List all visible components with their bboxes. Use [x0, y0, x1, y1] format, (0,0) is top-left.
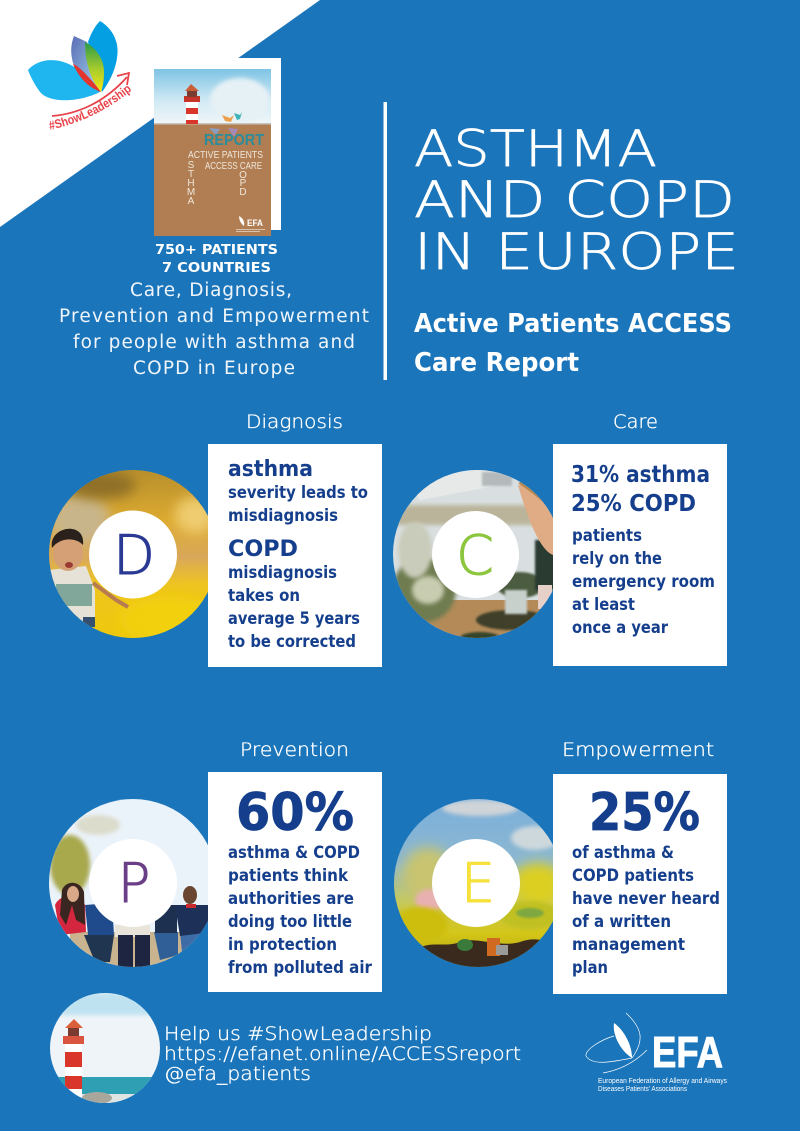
report description: COPD in Europe [133, 358, 295, 379]
title: IN EUROPE [414, 223, 739, 281]
panel: Diagnosis: misdiagnosis [228, 506, 338, 525]
title: ASTHMA [414, 120, 657, 178]
report cover: M [187, 187, 195, 198]
photo circle: Prevention: P [118, 852, 150, 915]
report stats: 750+ PATIENTS [155, 243, 278, 258]
panel: Diagnosis: severity leads to [228, 483, 368, 502]
photo circle: Empowerment: E [461, 852, 495, 915]
photo circle: lighthouse [50, 993, 160, 1104]
label: Care: Care [613, 411, 658, 433]
panel: Care [553, 444, 727, 666]
panel: Diagnosis [208, 444, 382, 667]
panel: Care: 31% asthma [571, 462, 710, 488]
report cover: H [187, 178, 195, 189]
label: Empowerment: Empowerment [562, 739, 714, 761]
title [414, 120, 739, 281]
report stats: 7 COUNTRIES [162, 261, 271, 276]
panel: Empowerment: COPD patients [572, 866, 694, 885]
panel: Diagnosis: asthma [228, 457, 313, 482]
panel: Care: emergency room [572, 572, 715, 591]
report description: Prevention and Empowerment [59, 306, 369, 327]
people [55, 896, 86, 935]
panel: Prevention: 60% [236, 783, 354, 843]
panel: Diagnosis: average 5 years [228, 609, 360, 628]
report description [59, 280, 369, 379]
photo circle: Prevention [49, 799, 217, 968]
logo: EFA [586, 1013, 727, 1093]
report cover: ACCESS CARE [205, 161, 262, 172]
report cover: O [239, 170, 247, 181]
photo circle: Empowerment [392, 799, 564, 970]
label: Diagnosis: Diagnosis [246, 411, 343, 433]
panel: Prevention: asthma & COPD [228, 843, 360, 862]
logo: EFA: Diseases Patients' Associations [598, 1086, 687, 1093]
report cover: ACTIVE PATIENTS [188, 150, 263, 161]
call to action text: https://efanet.online/ACCESSreport [164, 1043, 521, 1065]
subtitle [414, 309, 732, 378]
panel: Diagnosis: COPD [228, 537, 298, 562]
call to action text: @efa_patients [164, 1063, 311, 1085]
birds [209, 112, 242, 137]
logo: #ShowLeadership butterfly: #ShowLeadership [49, 86, 131, 130]
report cover: D [239, 187, 247, 198]
logo: EFA: EFA [652, 1028, 723, 1077]
call to action text: Help us #ShowLeadership [164, 1023, 432, 1045]
panel: Prevention [208, 772, 382, 992]
report description: Care, Diagnosis, [130, 280, 292, 301]
panel: Care: at least [572, 595, 635, 614]
panel: Empowerment: plan [572, 958, 608, 977]
report cover: P [240, 178, 247, 189]
report cover: S [188, 160, 195, 171]
panel: Diagnosis: misdiagnosis [228, 563, 337, 582]
logo: EFA: European Federation of Allergy and Airways [598, 1078, 727, 1085]
panel: Empowerment: management [572, 935, 685, 954]
panel: Prevention: authorities are [228, 889, 354, 908]
photo circle: Diagnosis [49, 470, 208, 638]
child [48, 566, 95, 625]
label: Prevention: Prevention [240, 739, 349, 761]
logo: #ShowLeadership butterfly [28, 21, 131, 130]
panel: Empowerment [553, 774, 727, 994]
report cover [154, 69, 271, 236]
title: AND COPD [414, 171, 735, 229]
photo circle: Care: C [456, 524, 494, 587]
panel: Empowerment: of a written [572, 912, 671, 931]
panel: Diagnosis: to be corrected [228, 632, 356, 651]
white corner triangle [0, 0, 320, 227]
panel: Empowerment: of asthma & [572, 843, 674, 862]
subtitle: Active Patients ACCESS [414, 309, 732, 339]
subtitle: Care Report [414, 348, 579, 378]
panel: Care: 25% COPD [571, 491, 696, 517]
cover text: REPORT [204, 132, 264, 149]
panel: Care: once a year [572, 618, 669, 637]
report cover: A [188, 196, 195, 207]
panel: Prevention: patients think [228, 866, 349, 885]
report cover: T [188, 169, 194, 180]
vertical rule [384, 102, 387, 380]
call to action text [164, 1023, 521, 1085]
photo circle: Care [393, 470, 553, 638]
lighthouse [184, 84, 200, 124]
panel: Prevention: in protection [228, 935, 337, 954]
white backing of report cover [160, 58, 281, 230]
panel: Care: patients [572, 526, 642, 545]
panel: Diagnosis: takes on [228, 586, 300, 605]
panel: Empowerment: 25% [589, 783, 700, 843]
report stats [155, 243, 278, 276]
panel: Empowerment: have never heard [572, 889, 720, 908]
report description: for people with asthma and [73, 332, 355, 353]
panel: Care: rely on the [572, 549, 662, 568]
panel: Prevention: from polluted air [228, 958, 373, 977]
panel: Prevention: doing too little [228, 912, 352, 931]
photo circle: Diagnosis: D [113, 524, 155, 587]
woman [518, 485, 553, 555]
report cover: EFA [247, 218, 263, 229]
